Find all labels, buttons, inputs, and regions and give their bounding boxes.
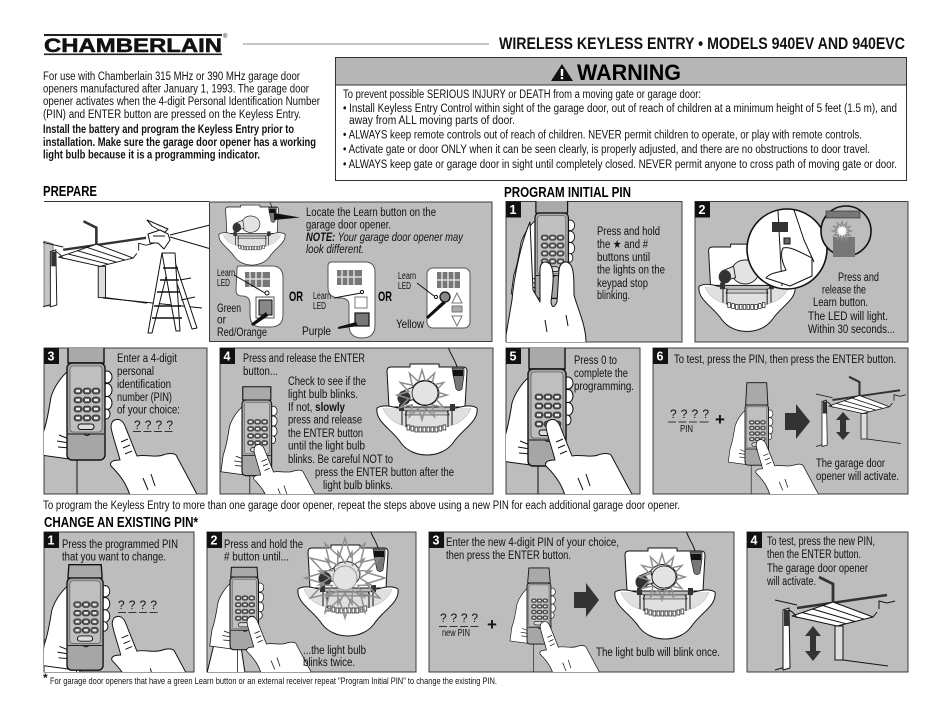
heading: change an existing pin: CHANGE AN EXISTING PIN*: [44, 515, 198, 531]
step number: 4: [750, 534, 758, 548]
text: step 4: [243, 353, 454, 492]
intro text block: installation. Make sure the garage door opener has a working: [43, 137, 316, 149]
text: step 3: of your choice:: [117, 404, 180, 416]
step number: 2: [698, 203, 706, 217]
icon: warning triangle: [551, 64, 573, 81]
illustration: keypad and pointing hand: [44, 348, 198, 494]
text: garage door activates: The garage door: [816, 458, 885, 470]
text: step 2: Press and hold the: [224, 539, 303, 551]
step number: [747, 532, 762, 548]
text: step 3: [446, 537, 619, 562]
logo: Chamberlain: ®: [223, 33, 228, 40]
illustration: keypad and pointing hand: [728, 382, 818, 494]
text: step 1: that you want to change.: [62, 552, 166, 564]
illustration: opener: [218, 202, 286, 266]
arrow: to learn button: [274, 213, 300, 220]
step number: [207, 532, 222, 548]
panel: change step 4: [747, 532, 908, 672]
panel: program step 1: [506, 201, 682, 342]
step number: [429, 532, 444, 548]
intro text block: openers manufactured after January 1, 1993. The garage door: [43, 84, 309, 96]
text: locate learn button: garage door opener.: [306, 220, 391, 232]
text: step 3: identification: [117, 379, 171, 391]
text: step 5: programming.: [574, 381, 634, 393]
illustration: garage door: [816, 377, 906, 446]
text: locate learn button: look different.: [306, 244, 364, 256]
text: blink once: The light bulb will blink once.: [596, 647, 720, 659]
step number: [220, 348, 235, 364]
text: step 4: If not, slowly: [288, 402, 346, 414]
step number: 1: [48, 534, 54, 548]
small opener: [147, 220, 170, 249]
step number: [44, 348, 59, 364]
intro text block: [43, 71, 320, 162]
plus sign: +: [487, 615, 497, 634]
text: step 1: the lights on the: [597, 264, 665, 276]
illustration: garage with ladder: [43, 202, 211, 333]
new pin placeholder: new PIN: [442, 628, 470, 639]
learn panel: green or red/orange: Green: [217, 301, 241, 315]
text: step 4: Press and release the ENTER: [243, 353, 365, 365]
arrow: up and down: [836, 412, 850, 440]
illustration: keypad and pointing hand: [207, 566, 312, 672]
step number: 3: [432, 534, 440, 548]
pin placeholder: [668, 407, 709, 435]
text: step 2: Within 30 seconds...: [808, 324, 895, 336]
panel: change step 2: [206, 532, 416, 672]
text: step 4: until the light bulb: [288, 440, 365, 452]
new pin placeholder: [439, 611, 478, 639]
text: step 1: [62, 539, 178, 564]
text: garage door activates: [816, 458, 899, 483]
learn panel: purple: Purple: [302, 324, 331, 338]
heading: program initial pin: PROGRAM INITIAL PIN: [504, 185, 631, 201]
ladder: [148, 253, 197, 333]
plus sign: +: [715, 410, 725, 429]
text: step 4: light bulb blinks.: [323, 480, 393, 492]
step number: 2: [210, 534, 218, 548]
learn panel: purple: [302, 262, 375, 338]
illustration: keypad and pointing hand: [44, 564, 186, 672]
illustration: garage door: [775, 577, 895, 670]
learn panel: yellow: [396, 268, 470, 331]
text: step 1: blinking.: [597, 290, 630, 302]
panel: program step 5: [506, 348, 640, 494]
text: step 5: complete the: [574, 368, 628, 380]
text: step 4: Check to see if the: [288, 376, 366, 388]
warning text: away from ALL moving parts of door.: [349, 115, 515, 127]
text: step 2: Learn button.: [813, 297, 868, 309]
text: locate learn button: Locate the Learn button on the: [306, 207, 436, 219]
text: blinks twice: blinks twice.: [303, 657, 355, 669]
text: step 3: [117, 353, 180, 416]
panel: locate learn button: [210, 191, 492, 342]
footnote: [43, 671, 497, 687]
text: step 5: [574, 355, 634, 393]
step number: [695, 202, 710, 218]
text: garage door activates: opener will activate.: [816, 471, 899, 483]
text: test instruction: To test, press the PIN, then press the ENTER button.: [674, 354, 896, 366]
logo: Chamberlain: [44, 33, 228, 57]
text: step 3: personal: [117, 366, 154, 378]
footnote: *: [43, 671, 48, 685]
text: step 2: release the: [822, 284, 866, 296]
illustration: keypad and pointing hand: [220, 386, 316, 494]
text: step 4: press the ENTER button after the: [315, 467, 454, 479]
panel: change step 3: [428, 532, 734, 672]
text: step 4: the ENTER button: [288, 428, 363, 440]
warning text: [343, 89, 897, 171]
warning text: To prevent possible SERIOUS INJURY or DEATH from a moving gate or garage door:: [343, 89, 701, 101]
note: multiple openers: To program the Keyless Entry to more than one garage door opener, repeat the steps above using a new PIN for each additional garage door opener.: [43, 500, 680, 512]
text: step 2: [808, 272, 895, 336]
step number: 6: [656, 350, 664, 364]
step number: [506, 202, 521, 218]
new pin placeholder: ? ? ? ?: [440, 611, 478, 625]
label: or: OR: [289, 288, 303, 304]
intro text block: (PIN) and ENTER button are pressed on the Keyless Entry.: [43, 109, 301, 121]
learn panel: green or red/orange: Learn: [217, 268, 235, 279]
text: step 2: # button until...: [224, 552, 289, 564]
step number: 4: [224, 350, 230, 364]
heading: prepare: PREPARE: [43, 184, 97, 200]
text: step 2: The LED will light.: [808, 311, 888, 323]
step number: 5: [510, 350, 516, 364]
learn panel: yellow: LED: [398, 281, 411, 292]
text: step 1: the ★ and #: [597, 239, 648, 251]
text: step 1: Press the programmed PIN: [62, 539, 178, 551]
panel: program step 4: [220, 348, 494, 494]
text: step 2: [224, 539, 303, 564]
step number: [653, 348, 668, 364]
text: step 1: keypad stop: [597, 278, 648, 290]
learn panel: purple: LED: [313, 301, 326, 312]
warning text: • ALWAYS keep remote controls out of reach of children. NEVER permit children to operate, or play with remote controls.: [343, 130, 862, 142]
text: blinks twice: [303, 645, 366, 669]
text: step 4: will activate.: [766, 576, 816, 588]
step number: [44, 532, 59, 548]
illustration: opener and magnifier: [699, 206, 871, 331]
text: step 3: Enter the new 4-digit PIN of your choice,: [446, 537, 619, 549]
warning text: • Activate gate or door ONLY when it can be seen clearly, is properly adjusted, and there are no obstructions to door travel.: [343, 144, 870, 156]
intro text block: opener activates when the 4-digit Personal Identification Number: [43, 96, 320, 108]
pin placeholder: PIN: [680, 424, 693, 435]
learn panel: green or red/orange: LED: [217, 278, 230, 289]
text: step 4: light bulb blinks.: [288, 389, 358, 401]
arrow: result: [574, 583, 599, 617]
step number: [506, 348, 521, 364]
learn panel: yellow: Learn: [398, 271, 416, 282]
panel: program step 6: [652, 348, 908, 494]
text: step 4: then the ENTER button.: [767, 549, 861, 561]
illustration: keypad and pointing hand: [510, 568, 600, 672]
learn panel: green or red/orange: [217, 266, 283, 339]
text: step 3: number (PIN): [117, 392, 172, 404]
step number: 1: [510, 203, 516, 217]
arrow: result: [785, 404, 810, 439]
panel: change step 1: [44, 532, 194, 672]
learn panel: yellow: Yellow: [396, 317, 424, 331]
learn panel: green or red/orange: Red/Orange: [217, 325, 267, 339]
illustration: opener with large burst: [298, 524, 398, 636]
label: or: OR: [378, 288, 392, 304]
learn panel: green or red/orange: or: [217, 312, 226, 326]
text: blinks twice: ...the light bulb: [303, 645, 366, 657]
text: step 4: button...: [243, 366, 278, 378]
text: step 4: blinks. Be careful NOT to: [288, 454, 393, 466]
learn panel: purple: Learn: [313, 291, 331, 302]
text: step 4: press and release: [288, 414, 362, 426]
text: step 5: Press 0 to: [574, 355, 617, 367]
illustration: opener with burst: [377, 343, 477, 455]
panel: program step 2: [695, 202, 908, 342]
pin placeholder: ? ? ? ?: [134, 418, 173, 432]
warning heading: WARNING: [577, 60, 681, 85]
intro text block: Install the battery and program the Keyless Entry prior to: [43, 124, 294, 136]
step number: 3: [48, 350, 54, 364]
illustration: two hands holding keypad: [506, 201, 586, 342]
intro text block: light bulb because it is a programming indicator.: [43, 150, 260, 162]
text: locate learn button: NOTE: Your garage door opener may: [306, 232, 464, 244]
logo: Chamberlain: CHAMBERLAIN: [44, 36, 222, 57]
text: locate learn button: [306, 207, 464, 256]
text: step 1: Press and hold: [597, 226, 660, 238]
arrow: up and down: [805, 626, 821, 661]
footnote: For garage door openers that have a green Learn button or an external receiver repeat "Program Initial PIN" to change the existing PIN.: [50, 676, 497, 687]
panel: program step 3: [44, 348, 208, 494]
panel: warning: [336, 58, 906, 180]
text: step 2: Press and: [838, 272, 879, 284]
text: step 3: then press the ENTER button.: [446, 550, 571, 562]
pin placeholder: ? ? ? ?: [118, 598, 157, 612]
pin placeholder: ? ? ? ?: [670, 407, 709, 421]
text: step 4: [766, 536, 875, 588]
text: step 1: buttons until: [597, 252, 650, 264]
illustration: keypad and pointing hand: [506, 348, 632, 494]
text: step 3: Enter a 4-digit: [117, 353, 178, 365]
text: step 4: To test, press the new PIN,: [767, 536, 875, 548]
illustration: opener with burst: [615, 527, 715, 639]
intro text block: For use with Chamberlain 315 MHz or 390 MHz garage door: [43, 71, 300, 83]
text: step 1: [597, 226, 665, 302]
text: step 4: The garage door opener: [767, 563, 868, 575]
